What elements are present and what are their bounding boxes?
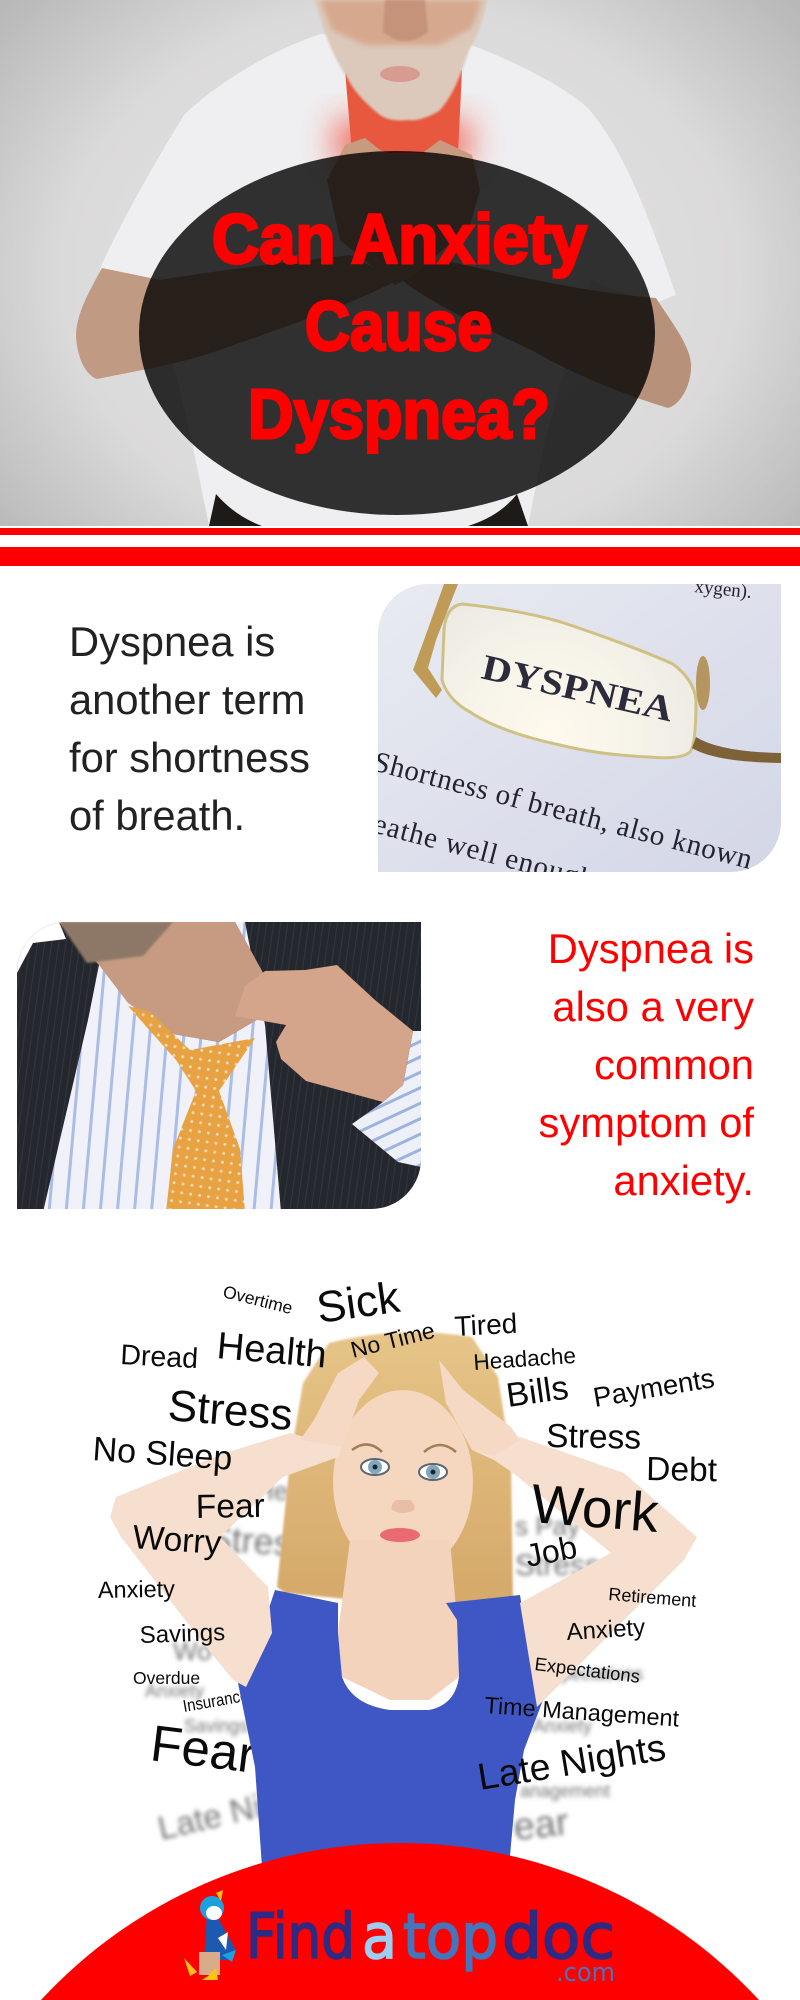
title: Cause <box>305 287 492 365</box>
word cloud: Savings <box>139 1619 226 1649</box>
neck and chest <box>338 1540 459 1700</box>
text block: definition <box>69 618 310 839</box>
blurred background words: Anxiety <box>533 1716 592 1736</box>
word cloud: Payments <box>591 1362 717 1413</box>
blurred background words: Expectations <box>540 1664 643 1684</box>
right hand <box>439 1360 520 1456</box>
panel: glasses over dictionary photo <box>378 584 781 872</box>
word cloud: Fear <box>195 1488 265 1526</box>
word cloud: Debt <box>646 1451 718 1489</box>
blurred background words: Savings <box>184 1716 248 1736</box>
title <box>212 200 587 453</box>
word cloud: Health <box>215 1325 328 1377</box>
blurred background words: s Pay <box>515 1511 580 1541</box>
text block: definition: Dyspnea is <box>69 618 275 665</box>
text block: definition: of breath. <box>69 792 245 839</box>
word cloud: No Time <box>348 1317 437 1363</box>
text block: definition: for shortness <box>69 734 310 781</box>
dictionary text <box>378 584 778 872</box>
title: Dyspnea? <box>248 375 550 453</box>
text block: symptom of anxiety: symptom of <box>539 1099 754 1146</box>
hair <box>277 1332 513 1613</box>
word cloud <box>91 1273 718 1798</box>
text block: symptom of anxiety: also a very <box>552 983 754 1030</box>
logo: Find <box>246 1900 355 1973</box>
word cloud: Bills <box>504 1369 571 1415</box>
right arm <box>388 262 691 408</box>
blurred background words <box>145 1476 643 1849</box>
sharp words behind the woman: Fear <box>148 1714 259 1784</box>
logo <box>246 1900 615 1988</box>
word cloud: Worry <box>131 1519 223 1562</box>
neck <box>59 922 263 1042</box>
word cloud: Retirement <box>608 1584 697 1611</box>
shirt <box>100 34 676 526</box>
word cloud: No Sleep <box>91 1430 234 1478</box>
belt <box>209 494 528 526</box>
blurred background words: Anxiety <box>145 1681 204 1701</box>
dictionary text: action <box>368 860 445 909</box>
left arm <box>76 255 398 379</box>
text block: definition: another term <box>69 676 305 723</box>
blurred background words: Late Ni <box>154 1787 264 1847</box>
word cloud: Expectations <box>534 1653 641 1687</box>
white background corner <box>17 922 66 973</box>
logo: .com <box>556 1958 615 1988</box>
text block: symptom of anxiety: Dyspnea is <box>548 925 754 972</box>
cuff <box>352 1031 421 1167</box>
eyes <box>361 1459 447 1480</box>
blurred background words: ear <box>512 1801 571 1849</box>
word cloud: Tired <box>454 1308 518 1342</box>
word cloud: Stress <box>546 1418 641 1457</box>
red footer dome <box>41 1843 759 2000</box>
word cloud: Time Management <box>484 1692 681 1732</box>
left arm <box>110 1433 342 1687</box>
sharp words behind the woman: Insurance <box>181 1686 250 1716</box>
word cloud: Dread <box>120 1339 199 1375</box>
word cloud: Late Nights <box>475 1726 669 1798</box>
face <box>314 0 487 120</box>
face <box>333 1390 473 1574</box>
blurred background words: Hea <box>255 1476 303 1506</box>
blurred background words: Stress <box>515 1549 600 1582</box>
word cloud: Work <box>529 1472 661 1544</box>
word cloud: Anxiety <box>98 1576 175 1603</box>
text block: symptom of anxiety: common <box>594 1041 754 1088</box>
right arm <box>472 1437 697 1707</box>
temple arm <box>692 737 781 763</box>
hands <box>327 138 480 285</box>
blue top <box>238 1590 543 1867</box>
lens word: DYSPNEA <box>478 647 677 729</box>
shirt <box>43 922 281 1212</box>
title ellipse <box>139 151 655 515</box>
word cloud: Headache <box>473 1343 577 1375</box>
text block: symptom of anxiety <box>539 925 754 1204</box>
logo: a <box>362 1900 397 1973</box>
left hand <box>300 1357 379 1447</box>
text block: symptom of anxiety: anxiety. <box>613 1157 754 1204</box>
title: Can Anxiety <box>212 200 587 278</box>
nose <box>383 0 428 41</box>
chin <box>59 922 173 963</box>
illustration: stressed woman <box>110 1332 697 1867</box>
red throat glow <box>335 120 470 165</box>
frame hinge <box>413 584 458 698</box>
logo: doc <box>502 1900 615 1973</box>
blurred background words: anagement <box>520 1781 610 1801</box>
dictionary text: eathe well enough. The <box>370 808 659 912</box>
mouth <box>380 66 420 82</box>
lips <box>380 1528 420 1542</box>
lens <box>442 604 696 758</box>
panel: man loosening tie photo <box>17 922 421 1212</box>
nose <box>392 1500 414 1513</box>
hand <box>235 965 413 1102</box>
panel: hero photo of man holding his throat <box>0 0 800 526</box>
logo: top <box>403 1900 498 1973</box>
icon: bird mascot <box>184 1890 236 1980</box>
blurred background words: Stres <box>206 1517 293 1564</box>
dictionary text: Shortness of breath, also known <box>370 746 756 876</box>
tie <box>128 1006 255 1212</box>
word cloud: Job <box>522 1529 580 1574</box>
nose pad <box>696 656 710 710</box>
word cloud: Overdue <box>133 1668 200 1688</box>
eyebrows <box>352 1444 456 1452</box>
dictionary text: xygen). <box>693 576 753 603</box>
word cloud: Sick <box>314 1273 404 1333</box>
word cloud: Anxiety <box>566 1614 646 1646</box>
red divider stripes <box>0 528 800 566</box>
word cloud: Stress <box>166 1381 294 1440</box>
blurred background words: Wo <box>173 1636 212 1666</box>
neck <box>345 70 462 153</box>
word cloud: Overtime <box>221 1281 295 1318</box>
